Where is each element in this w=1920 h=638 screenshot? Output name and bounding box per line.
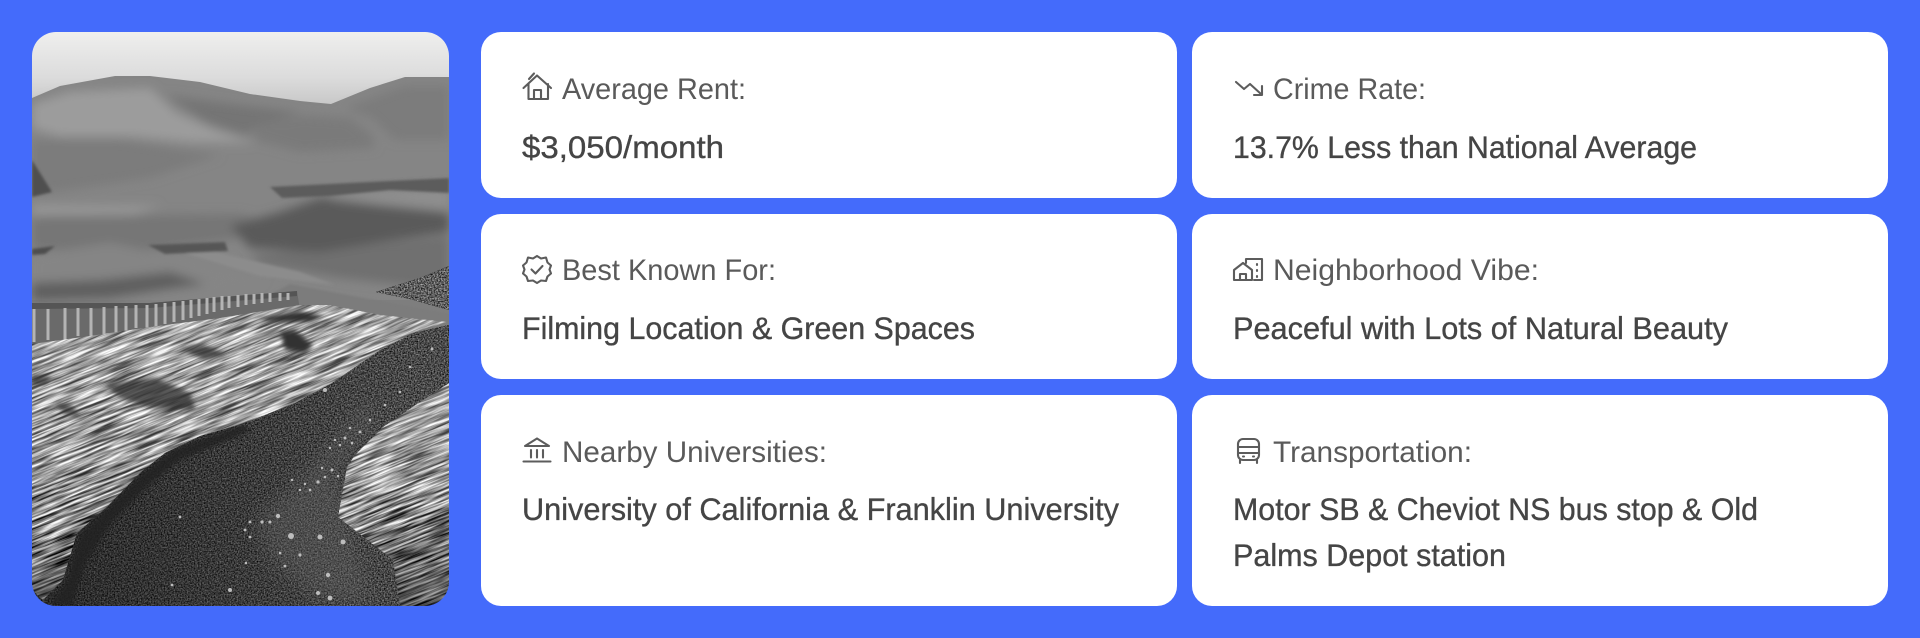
label: neighborhood vibe: Neighborhood Vibe: [1273, 254, 1539, 287]
grass dark tufts [32, 311, 325, 418]
label: transportation: Transportation: [1273, 436, 1472, 469]
value: average rent: $3,050/month [522, 129, 724, 165]
icon: house [524, 74, 551, 99]
gravel [171, 348, 434, 600]
value: transportation: Palms Depot station [1233, 537, 1506, 573]
value: crime rate: 13.7% Less than National Average [1233, 129, 1697, 165]
icon: badge check [523, 256, 551, 283]
dark verge [50, 424, 248, 606]
panel: transportation [1192, 395, 1888, 606]
panel: nearby universities [481, 395, 1177, 606]
icon: university building [524, 438, 550, 462]
panel: crime rate [1192, 32, 1888, 198]
fence backdrop [32, 292, 299, 344]
label: best known for: Best Known For: [562, 254, 776, 287]
fence posts [34, 293, 288, 342]
label: average rent: Average Rent: [562, 73, 746, 106]
panel: neighborhood vibe [1192, 214, 1888, 379]
value: transportation: Motor SB & Cheviot NS bus stop & Old [1233, 491, 1758, 527]
value: nearby universities: University of California & Franklin University [522, 491, 1119, 527]
panel: average rent [481, 32, 1177, 198]
icon: house and building [1234, 259, 1262, 280]
grass left [32, 305, 447, 600]
grass right [338, 383, 449, 606]
value: neighborhood vibe: Peaceful with Lots of Natural Beauty [1233, 310, 1728, 346]
value: best known for: Filming Location & Green Spaces [522, 310, 975, 346]
value: transportation [1233, 491, 1758, 573]
panel: best known for [481, 214, 1177, 379]
photo: moorland path [32, 32, 449, 606]
label: crime rate: Crime Rate: [1273, 73, 1426, 106]
path ground [32, 325, 449, 606]
label: nearby universities: Nearby Universities: [562, 436, 827, 469]
icon: trending down [1236, 82, 1262, 95]
gravel band [255, 400, 375, 600]
icon: bus [1238, 439, 1259, 463]
